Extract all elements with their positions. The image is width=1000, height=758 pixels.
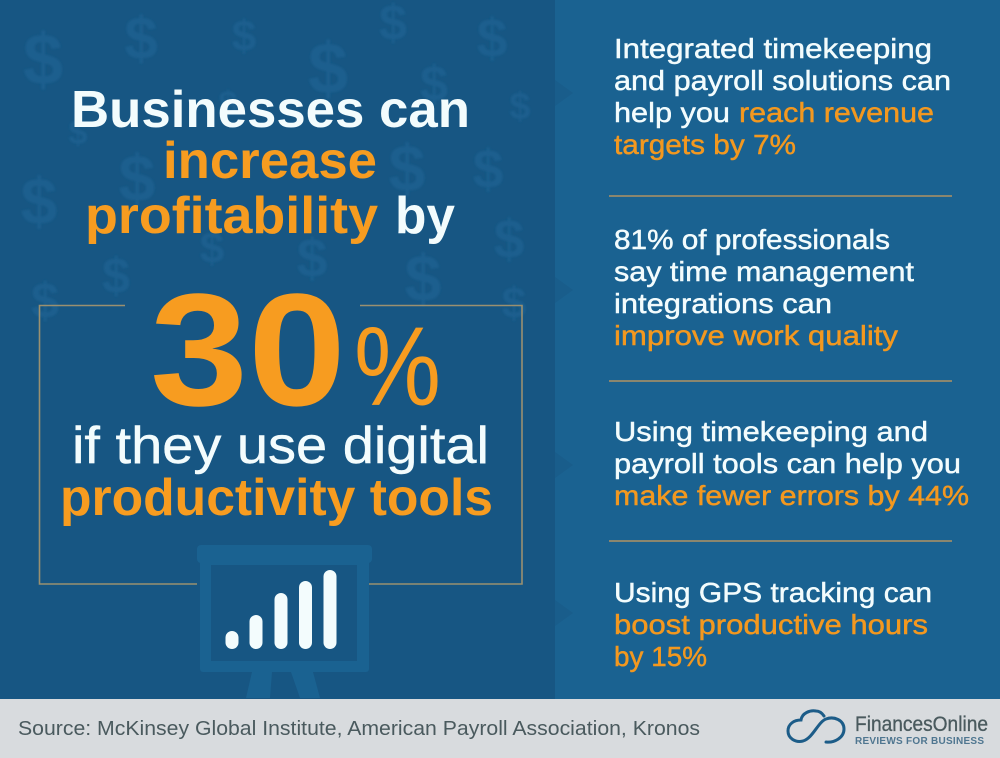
- background pattern: dollar signs: $: [473, 138, 503, 200]
- background pattern: dollar signs: $: [31, 273, 59, 329]
- logo: FinancesOnline: [788, 711, 988, 747]
- text: if they use digital productivity tools: [60, 417, 493, 527]
- background pattern: dollar signs: $: [494, 208, 524, 270]
- logo: FinancesOnline: REVIEWS FOR BUSINESS: [855, 736, 984, 747]
- panel: right background: [555, 0, 1000, 699]
- background pattern: dollar signs: $: [297, 227, 327, 289]
- text: work quality stat: improve work quality: [614, 320, 898, 351]
- text: revenue targets stat: [614, 33, 951, 160]
- background pattern: dollar signs: [21, 0, 531, 329]
- heading: businesses can increase profitability by: profitability: [85, 187, 378, 245]
- background pattern: dollar signs: $: [21, 164, 57, 238]
- text: if they use digital productivity tools: if they use digital: [72, 417, 489, 475]
- text: fewer errors stat: payroll tools can help you: [614, 448, 961, 479]
- big number: 30%: [150, 260, 441, 439]
- background pattern: dollar signs: $: [69, 114, 88, 152]
- icon: presentation board with bar chart: [197, 545, 372, 698]
- text: revenue targets stat: targets by 7%: [614, 129, 796, 160]
- heading: businesses can increase profitability by: [71, 81, 470, 245]
- text: productive hours stat: [614, 577, 932, 672]
- background pattern: dollar signs: $: [420, 56, 448, 112]
- text: productive hours stat: by 15%: [614, 641, 707, 672]
- text: work quality stat: [614, 224, 914, 351]
- text: productive hours stat: boost productive hours: [614, 609, 928, 640]
- background pattern: dollar signs: $: [477, 7, 507, 69]
- text: productive hours stat: Using GPS tracking can: [614, 577, 932, 608]
- background pattern: dollar signs: $: [102, 248, 130, 304]
- logo: FinancesOnline: FinancesOnline: [855, 713, 988, 736]
- text: revenue targets stat: and payroll solutions can: [614, 65, 951, 96]
- big number: 30%: %: [354, 304, 441, 429]
- background pattern: dollar signs: $: [308, 29, 348, 109]
- text: work quality stat: say time management: [614, 256, 914, 287]
- background pattern: dollar signs: $: [405, 241, 441, 315]
- panel: left background: [0, 0, 555, 699]
- text: fewer errors stat: Using timekeeping and: [614, 416, 928, 447]
- background pattern: dollar signs: $: [124, 5, 158, 72]
- text: work quality stat: 81% of professionals: [614, 224, 890, 255]
- heading: businesses can increase profitability by: by: [395, 187, 455, 245]
- background pattern: dollar signs: $: [509, 86, 531, 128]
- panel: footer: [0, 699, 1000, 758]
- big number: 30%: 30: [150, 260, 346, 439]
- text: source: Source: McKinsey Global Institute, American Payroll Association, Kronos: [18, 718, 700, 740]
- background pattern: dollar signs: $: [119, 141, 155, 215]
- text: fewer errors stat: make fewer errors by 44%: [614, 480, 969, 511]
- text: revenue targets stat: reach revenue: [739, 97, 934, 128]
- background pattern: dollar signs: $: [200, 224, 224, 273]
- text: work quality stat: integrations can: [614, 288, 832, 319]
- divider lines: [609, 196, 952, 541]
- text: revenue targets stat: help you: [614, 97, 730, 128]
- background pattern: dollar signs: $: [389, 131, 425, 205]
- text: fewer errors stat: [614, 416, 969, 511]
- background pattern: dollar signs: $: [502, 279, 526, 328]
- background pattern: dollar signs: $: [232, 12, 256, 61]
- heading: businesses can increase profitability by: increase: [163, 132, 377, 190]
- text: if they use digital productivity tools: productivity tools: [60, 469, 493, 527]
- icon: cloud: [788, 711, 844, 742]
- text: revenue targets stat: Integrated timekeeping: [614, 33, 932, 64]
- frame around statistic: [40, 306, 522, 584]
- heading: businesses can increase profitability by: Businesses can: [71, 81, 470, 139]
- background pattern: dollar signs: $: [23, 20, 63, 100]
- background pattern: dollar signs: $: [219, 85, 238, 123]
